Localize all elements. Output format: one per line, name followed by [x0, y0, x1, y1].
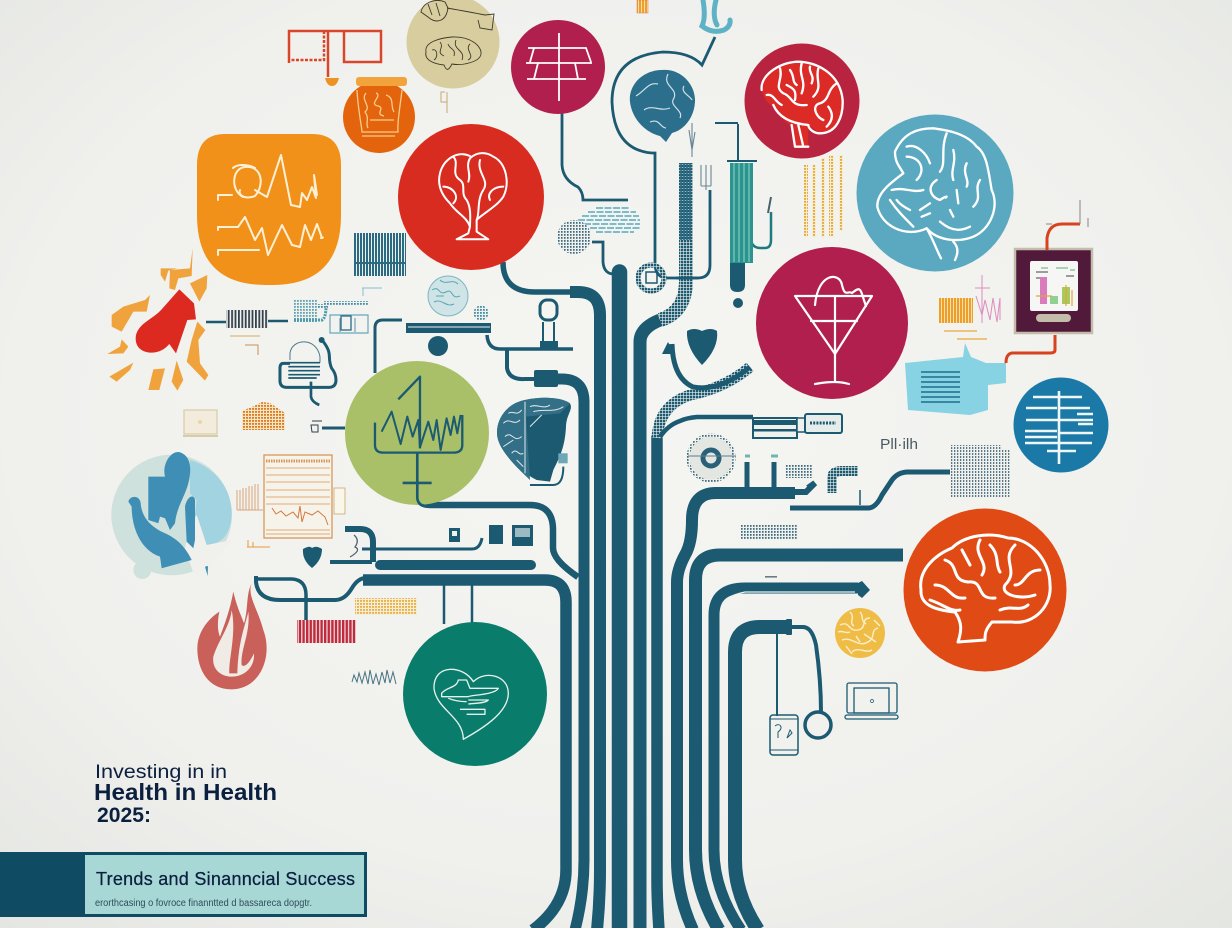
- panel: subtitle banner: Trends and Sinanncial Success: [96, 869, 355, 889]
- icon: red heart sunburst: [107, 248, 208, 391]
- chart: yellow dotted strip: [355, 598, 417, 615]
- icon: cable boxes: [753, 414, 842, 438]
- icon: bottle device: [540, 300, 558, 348]
- icons: small devices row: [449, 525, 533, 546]
- thin antenna: [1046, 200, 1088, 227]
- pipes: secondary left branches: [206, 320, 578, 624]
- red connectors: [1006, 224, 1080, 363]
- icon: phone: [770, 715, 798, 755]
- panel: orange pulse card: [197, 134, 341, 285]
- title: Investing in in: [95, 762, 227, 783]
- icon: blue gauge circle: [1014, 378, 1108, 472]
- icon: dotted ball brains: [428, 276, 488, 320]
- panel: subtitle banner: [0, 852, 367, 917]
- title: [94, 762, 277, 827]
- icon: red frames and bowl: [288, 31, 381, 86]
- chart: orange line panel: [237, 455, 345, 547]
- icon: laptop: [845, 683, 898, 719]
- chart: dark bars: [354, 233, 406, 276]
- icon: small pointer: [311, 421, 322, 432]
- pipes: thin upper connectors: [562, 37, 715, 278]
- arrow pipe: [722, 581, 870, 606]
- icon: arrow head: [662, 342, 675, 354]
- icon: dark ball: [428, 336, 448, 356]
- icon: brain map: [497, 398, 571, 485]
- icon: pipe coupling: [534, 370, 558, 387]
- icon: blue brain circle: [856, 114, 1014, 272]
- pipes: right thin branches: [660, 123, 950, 716]
- chart: orange dotted columns: [804, 155, 843, 237]
- chart: red bars: [297, 620, 356, 643]
- icon: elbow connectors: [745, 456, 858, 493]
- small connector cap: [786, 619, 792, 635]
- icon: dotted gear: [638, 265, 664, 291]
- icon: padlock device: [280, 337, 336, 405]
- chart: tiny skyline: [352, 670, 396, 685]
- chart: barcode: [226, 310, 268, 355]
- icon: dotted target: [688, 435, 736, 481]
- title: 2025:: [97, 804, 151, 827]
- icon: light-blue projector: [905, 343, 1006, 415]
- chart: orange and pink bars: [939, 275, 1000, 339]
- icon: connector bar: [406, 323, 491, 333]
- icon: tiny figure: [350, 535, 358, 557]
- icon: flame: [197, 583, 267, 689]
- icon: yellow brain: [835, 608, 885, 658]
- title: Health in Health: [94, 779, 277, 805]
- pipes: dotted branches: [657, 163, 750, 438]
- icon: small beige laptop: [183, 410, 218, 437]
- icon: light-blue abstract figure circle: [111, 452, 232, 579]
- icon: small top bar mark: [637, 0, 648, 13]
- icon: teal test tube: [730, 163, 771, 308]
- icon: lime chart circle: [345, 361, 489, 506]
- icon: monitor: [1015, 249, 1092, 333]
- icon: small dark heart: [303, 547, 322, 568]
- icon: stethoscope ring: [805, 712, 831, 738]
- panel: subtitle banner: erorthcasing o fovroce finanntted d bassareca dopgtr.: [95, 898, 312, 909]
- chart: dotted grid: [950, 445, 1010, 497]
- illustration: light blue car and ball: [557, 208, 640, 254]
- tree trunk and main pipes: [363, 262, 903, 928]
- chart: teal dotted schematic: [293, 288, 382, 333]
- icon: khaki brain circle: [406, 0, 500, 113]
- icon: orange brain circle: [904, 508, 1066, 672]
- handwritten scribble label: Pll·ilh: [880, 436, 918, 453]
- icon: crimson brain circle: [744, 44, 860, 158]
- chart: dotted small bars: [741, 525, 798, 539]
- icon: teal-blue brain: [630, 70, 695, 142]
- icon: green heart circle: [403, 622, 547, 766]
- chart: orange comb bars: [242, 402, 285, 430]
- icon: teal stethoscope hook: [702, 0, 730, 31]
- icon: orange jar circle: [343, 77, 415, 153]
- icon: crimson grid circle: [511, 20, 605, 114]
- tiny dash: [765, 576, 777, 578]
- icon: cocktail glass circle: [756, 247, 908, 399]
- icon: heart: [687, 329, 717, 365]
- icon: red tree brain circle: [398, 124, 544, 270]
- icon: small fork glyphs: [689, 123, 711, 190]
